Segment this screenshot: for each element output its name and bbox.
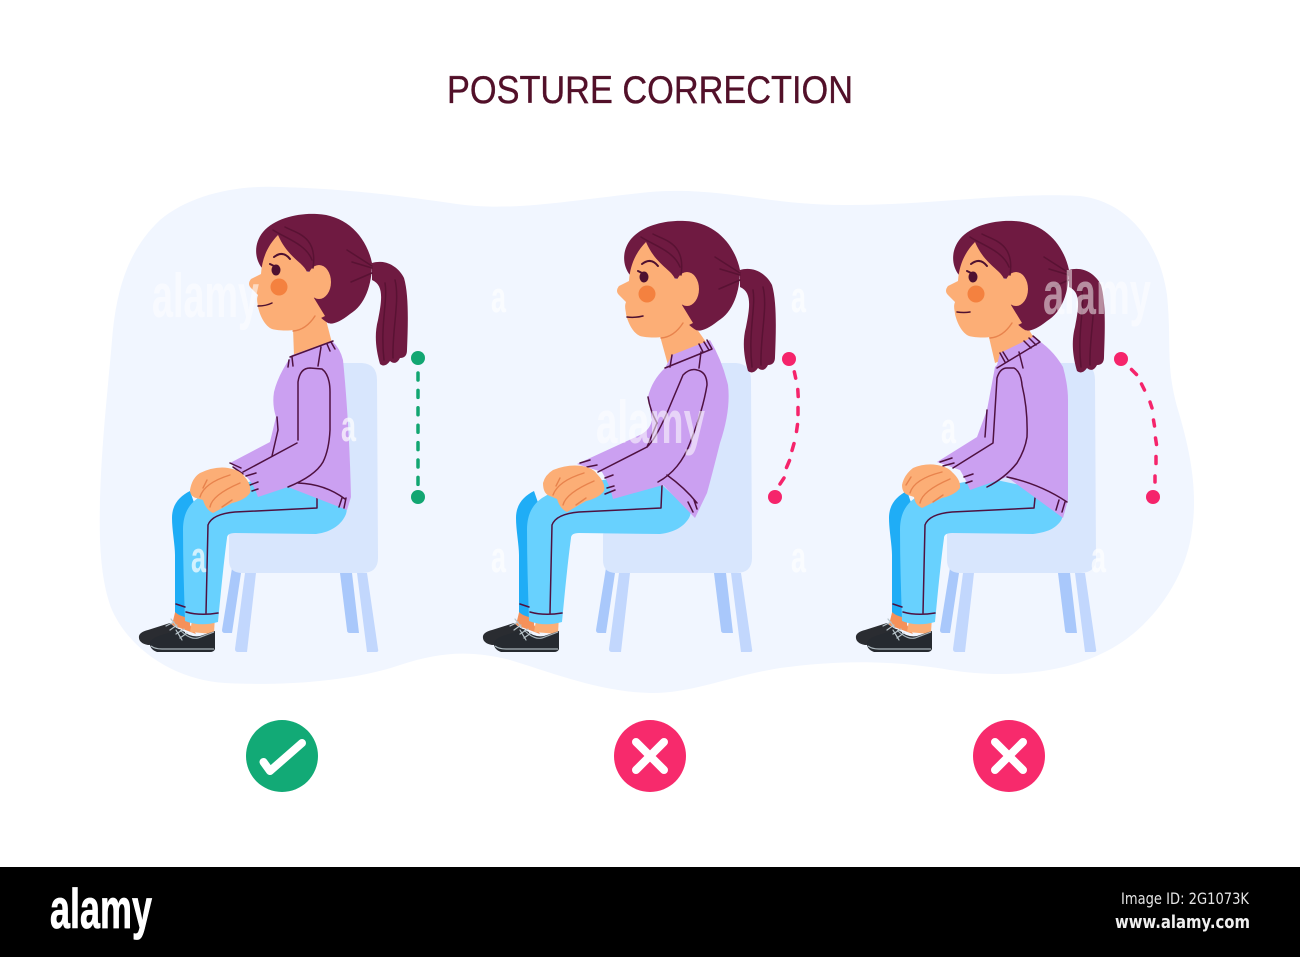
head 3 <box>946 221 1105 372</box>
watermarks: a <box>791 273 806 322</box>
watermarks: a <box>941 404 956 453</box>
icon: pink cross middle <box>614 720 686 792</box>
chair 2 <box>596 363 752 652</box>
icon: pink cross right <box>973 720 1045 792</box>
watermarks: a <box>791 533 806 582</box>
icon: green check <box>246 720 318 792</box>
watermarks: alamy <box>596 389 705 456</box>
head 2 <box>617 221 776 372</box>
alignment line: upper curve <box>1114 352 1160 504</box>
head 1 <box>249 214 408 365</box>
watermarks: a <box>1091 533 1106 582</box>
torso 3 <box>937 318 1068 518</box>
website: www.alamy.com <box>1115 912 1250 933</box>
chair 3 <box>940 363 1096 652</box>
hands 1 <box>190 468 250 513</box>
watermarks: alamy <box>152 262 259 331</box>
watermarks <box>152 260 1151 582</box>
image id: Image ID: 2G1073K <box>1121 889 1249 908</box>
torso 1 <box>230 316 351 510</box>
alignment line: lower curve <box>768 352 798 504</box>
background blob <box>100 187 1194 693</box>
watermarks: a <box>191 533 206 582</box>
watermarks: a <box>341 402 356 451</box>
legs 1 <box>139 478 347 652</box>
watermarks: a <box>491 533 506 582</box>
legs 2 <box>483 478 690 652</box>
figure 1: correct posture <box>139 214 425 652</box>
title: POSTURE CORRECTION <box>447 69 853 112</box>
footer logo: alamy <box>50 877 152 940</box>
alignment line: straight <box>411 351 425 504</box>
torso 2 <box>577 322 729 518</box>
watermarks: a <box>491 273 506 322</box>
figure 3: hunched upper back <box>856 221 1160 652</box>
hands 3 <box>902 464 960 508</box>
watermarks: alamy <box>1043 260 1151 327</box>
footer bar <box>0 867 1300 957</box>
chair 1 <box>222 363 378 652</box>
hands 2 <box>543 466 604 512</box>
legs 3 <box>856 478 1062 652</box>
figure 2: slouching lower back <box>483 221 798 652</box>
